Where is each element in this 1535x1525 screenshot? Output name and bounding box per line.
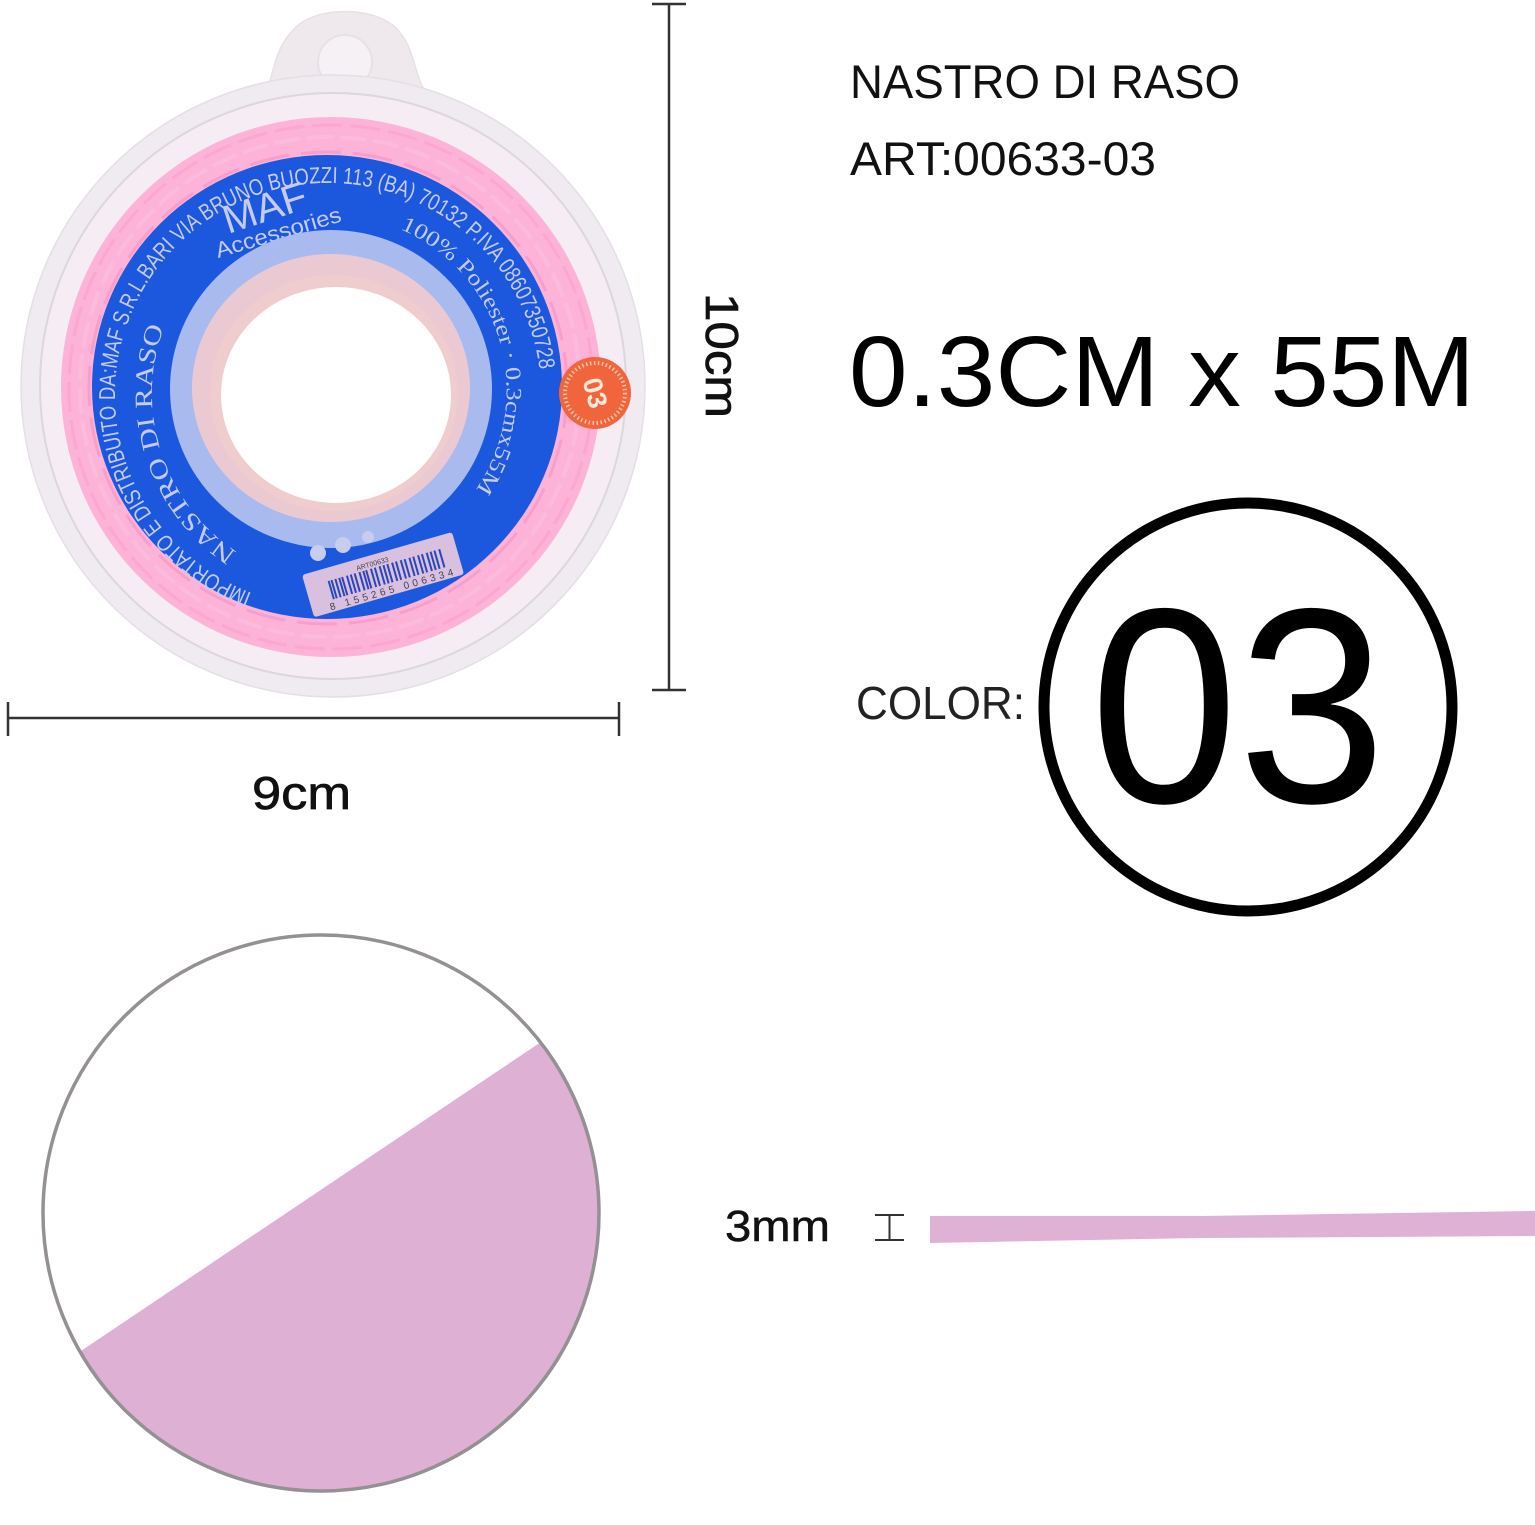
hanging hole [318, 35, 372, 89]
article number: ART:00633-03 [850, 132, 1156, 185]
label logo: MAF: MAF [217, 174, 313, 243]
ribbon strip [930, 1211, 1535, 1243]
label logo: Accessories: Accessories [212, 202, 344, 263]
barcode sticker: 8 155265 006334 [329, 567, 455, 613]
dimension: height 10cm [652, 4, 748, 690]
barcode sticker [302, 532, 464, 618]
label text: material: 100% Poliester · 0.3cmx55M [402, 218, 522, 496]
colour number in circle: 03 [1090, 550, 1386, 861]
label text: product name: NASTRO DI RASO [136, 325, 236, 565]
case hanging tab [262, 11, 432, 100]
size heading: 0.3CM x 55M [849, 316, 1475, 428]
orange colour badge 03 [559, 357, 631, 429]
swatch: magnified satin in circle [43, 935, 620, 1520]
clear inner ring [170, 230, 492, 548]
pink ribbon winding [61, 117, 601, 657]
pale core ring [192, 254, 470, 522]
width label 3mm: 3mm [725, 1202, 830, 1251]
title: product name: NASTRO DI RASO [850, 55, 1240, 108]
colour label: COLOR: [856, 677, 1025, 729]
case outer disc [21, 75, 645, 697]
blue label disc [92, 155, 562, 619]
barcode sticker: ART00633 [356, 557, 390, 573]
width marker icon [875, 1215, 904, 1240]
dimension: height 10cm: 10cm [696, 293, 748, 418]
centre hole [221, 287, 451, 503]
dimension: width 9cm: 9cm [252, 767, 351, 819]
product: ribbon spool in clear case [20, 10, 646, 698]
colour number in circle [1044, 503, 1452, 911]
label text: distributor address: IMPORTATO E DISTRIBUITO DA:MAF S.R.L.BARI VIA BRUNO BUOZZI 113 (BA) 70132 P.IVA 08607350728 [99, 167, 555, 607]
orange colour badge 03: 03 [577, 375, 613, 411]
dimension: width 9cm [8, 702, 619, 819]
recycling icons [310, 531, 374, 561]
